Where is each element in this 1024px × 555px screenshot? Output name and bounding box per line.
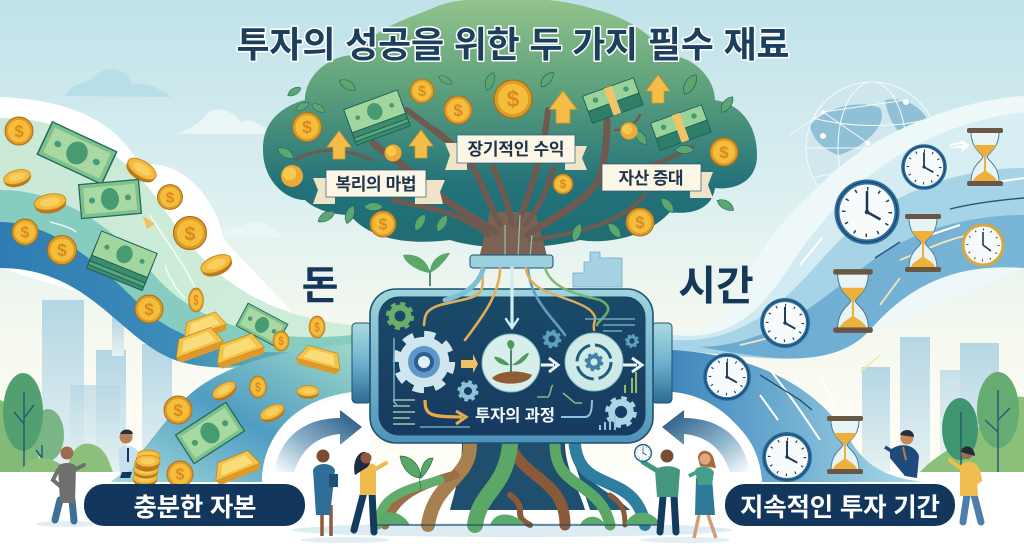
banner: 자산 증대 (602, 164, 713, 198)
pill: 지속적인 투자 기간 (725, 484, 955, 526)
machine side connectors (352, 323, 672, 403)
curved arrow: capital into process (262, 392, 370, 482)
banner: 복리의 마법: 복리의 마법 (336, 175, 416, 194)
small gears (388, 304, 638, 426)
time stream: clocks (705, 146, 1003, 480)
city skyline right (862, 337, 999, 475)
big gear (398, 336, 450, 388)
money tree canopy (263, 0, 757, 247)
mini city beside process (573, 252, 622, 287)
background clouds (65, 69, 284, 238)
stream: money lower flow (110, 344, 352, 482)
banner: 장기적인 수익 (445, 135, 587, 170)
tree leaves (275, 69, 736, 243)
process machine (352, 255, 672, 443)
coin stream: left money items (2, 117, 344, 487)
tree cash stacks (344, 78, 711, 150)
time stream: hourglasses (827, 128, 1003, 474)
growth arrows (327, 75, 670, 159)
roots below process (378, 443, 645, 525)
tree coins and fruit (281, 79, 738, 237)
person: woman in yellow (354, 452, 386, 532)
stream: time upper flow (672, 96, 1024, 372)
label: 시간: 시간 (678, 263, 754, 309)
stream: money upper flow (0, 97, 352, 368)
flow arrows (425, 354, 642, 424)
plant circle (482, 334, 540, 392)
curved arrow: time into process (654, 392, 762, 482)
top connector (470, 255, 553, 268)
white ground (0, 472, 1024, 555)
banner: 장기적인 수익: 장기적인 수익 (468, 140, 564, 159)
person: man in suit (885, 430, 919, 478)
person: woman in yellow sweater (950, 446, 981, 522)
process label: 투자의 과정 (475, 406, 555, 425)
pill: 충분한 자본: 충분한 자본 (134, 494, 256, 522)
label: 돈: 돈 (302, 264, 338, 308)
city skyline left (42, 300, 172, 475)
globe network (790, 82, 938, 214)
pill: 지속적인 투자 기간: 지속적인 투자 기간 (740, 494, 940, 522)
inner roots (424, 268, 608, 340)
coin pile (133, 450, 160, 487)
banner: 자산 증대: 자산 증대 (618, 169, 684, 188)
sprout beside process (403, 253, 450, 286)
person: woman with pad (689, 451, 716, 538)
person: man in grey sweater (36, 446, 96, 527)
stream: time lower flow (672, 350, 925, 482)
person: man with clock (635, 445, 730, 543)
banner: 복리의 마법 (313, 170, 445, 204)
title: 투자의 성공을 위한 두 가지 필수 재료 (236, 24, 790, 65)
trees left (0, 373, 113, 472)
cycle circle (565, 333, 623, 391)
root leaves ground (370, 456, 660, 525)
small data lines (393, 319, 636, 430)
pill: 충분한 자본 (84, 484, 305, 526)
person: woman with tablet (300, 450, 390, 543)
person: man behind coins (118, 430, 138, 478)
trees right (920, 372, 1024, 472)
ground shadow (292, 523, 732, 537)
tree trunk and branches (296, 110, 693, 262)
